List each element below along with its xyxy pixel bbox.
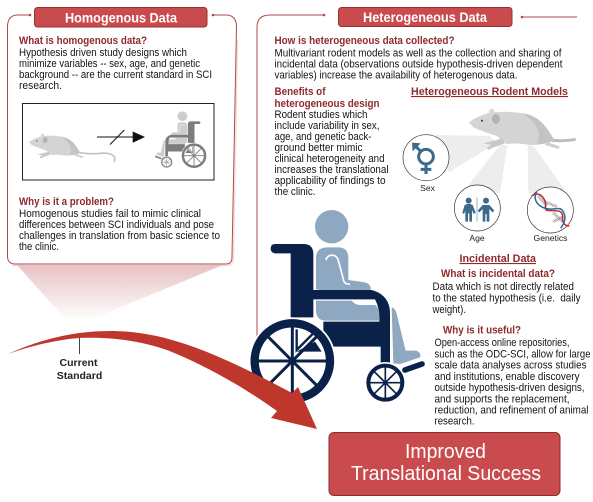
text: incidental data: to the stated hypothesis (i.e. daily [432, 292, 581, 304]
panel: heterogeneous data [257, 8, 577, 349]
text: how is heterogeneous data collected [274, 35, 563, 82]
text: what is homogenous data: What is homogenous data? [19, 35, 147, 47]
text: why is it useful: outside hypothesis-driven designs, [434, 382, 584, 394]
figure: mouse does not translate to patient [22, 104, 214, 180]
text: why is it a problem: challenges in translation from basic science to [19, 230, 220, 242]
text: why is it a problem: Homogenous studies fail to mimic clinical [19, 208, 201, 220]
figure: rodent model variables [403, 109, 576, 243]
text: what is homogenous data: research. [19, 80, 62, 92]
text: incidental data [432, 253, 581, 316]
box: improved translational success: Improved [405, 440, 486, 463]
text: why is it useful: and institutions, enable discovery [434, 371, 580, 383]
text: what is homogenous data [19, 35, 212, 92]
text: benefits of heterogeneous design [274, 86, 388, 198]
heading: heterogeneous rodent models: Heterogeneous Rodent Models [411, 86, 568, 98]
heading: heterogeneous data [338, 8, 512, 26]
text: incidental data: What is incidental data? [441, 268, 555, 280]
panel: homogenous data [8, 8, 238, 266]
text: incidental data: Data which is not directly related [432, 281, 574, 293]
icon: age [454, 185, 500, 231]
icon: large wheelchair [249, 210, 422, 405]
label: current standard: Current [60, 357, 98, 369]
text: how is heterogeneous data collected: Multivariant rodent models as well as the collection and sharing of [274, 48, 562, 60]
text: benefits of heterogeneous design: include variability in sex, [274, 120, 380, 132]
text: why is it useful [434, 324, 591, 428]
label: current standard [57, 338, 102, 382]
heading: homogenous data: Homogenous Data [65, 10, 177, 26]
icon: sex [403, 135, 449, 181]
text: what is homogenous data: minimize variables -- sex, age, and genetic [19, 58, 201, 70]
text: benefits of heterogeneous design: the clinic. [274, 186, 316, 198]
box: improved translational success: Translational Success [351, 462, 541, 485]
text: benefits of heterogeneous design: ground better mimic [274, 142, 363, 154]
heading: homogenous data [34, 8, 207, 27]
text: benefits of heterogeneous design: Rodent studies which [274, 109, 368, 121]
text: benefits of heterogeneous design: increases the translational [274, 164, 388, 176]
text: incidental data: weight). [432, 304, 466, 316]
text: benefits of heterogeneous design: Benefits of [274, 86, 326, 98]
text: how is heterogeneous data collected: incidental data (observations outside hypothesis-driven dependent [274, 58, 563, 70]
text: why is it useful: Open-access online repositories, [434, 337, 570, 349]
text: how is heterogeneous data collected: variables) increase the availability of heterogenous data. [274, 70, 518, 82]
label: genetics: Genetics [534, 233, 567, 243]
text: what is homogenous data: background -- are the current standard in SCI [19, 69, 212, 81]
label: current standard: Standard [57, 370, 102, 382]
icon: genetics [527, 187, 573, 233]
icon: crossed arrow [97, 130, 145, 144]
label: sex: Sex [420, 183, 436, 193]
text: why is it useful: and supports the replacement, [434, 394, 570, 406]
text: benefits of heterogeneous design: clinical heterogeneity and [274, 153, 385, 165]
text: benefits of heterogeneous design: age, and genetic back- [274, 131, 372, 143]
text: how is heterogeneous data collected: How is heterogeneous data collected? [274, 35, 455, 47]
box: improved translational success [329, 432, 560, 496]
text: why is it useful: Why is it useful? [443, 324, 521, 336]
text: why is it useful: research. [434, 416, 474, 428]
text: why is it a problem: Why is it a problem? [19, 196, 114, 208]
projection from panel to curve [17, 265, 223, 321]
text: why is it a problem: differences between SCI individuals and pose [19, 219, 214, 231]
text: why is it a problem [19, 196, 220, 253]
label: age: Age [469, 233, 485, 243]
heading: heterogeneous data: Heterogeneous Data [363, 9, 487, 25]
text: benefits of heterogeneous design: heterogeneous design [274, 98, 380, 110]
text: incidental data: Incidental Data [460, 253, 537, 265]
text: what is homogenous data: Hypothesis driven study designs which [19, 47, 187, 59]
text: benefits of heterogeneous design: applicability of findings to [274, 175, 386, 187]
icon: grey wheelchair [156, 111, 207, 169]
icon: grey mouse [29, 134, 115, 162]
arrow: current standard to improved success [8, 331, 317, 429]
text: why is it a problem: the clinic. [19, 241, 59, 253]
